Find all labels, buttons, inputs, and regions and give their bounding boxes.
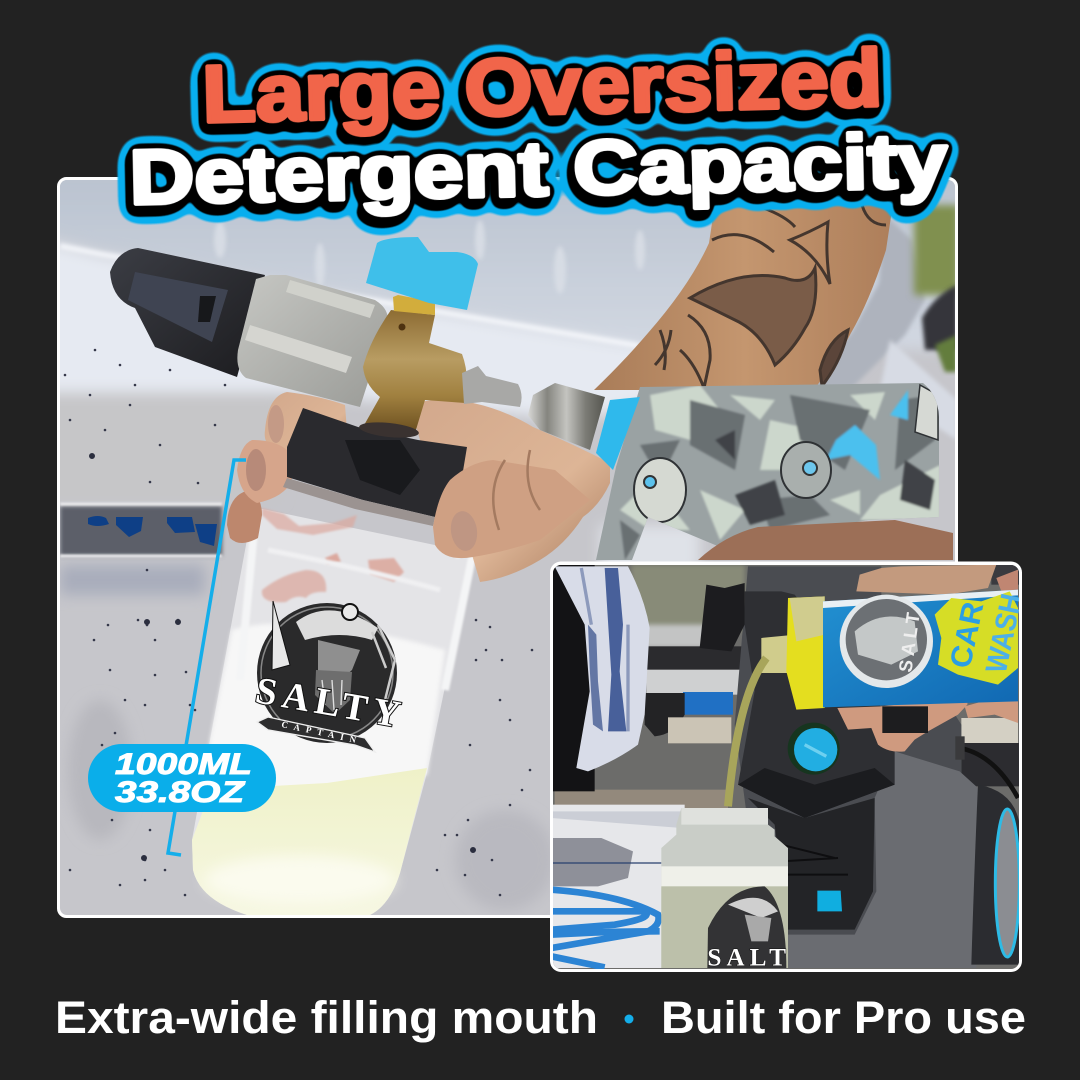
- inset scene: [548, 558, 1029, 978]
- feature: pro use: Built for Pro use: [661, 992, 1026, 1043]
- car wash bottle: [761, 590, 1029, 710]
- thumb: [433, 450, 590, 558]
- power cable: [960, 748, 1018, 798]
- ribbon caption: CAPTAIN: [281, 719, 357, 745]
- washer wheel: [971, 785, 1020, 965]
- detergent stream: [728, 658, 766, 806]
- foam bubble speckles: [65, 350, 532, 895]
- upper hand: [856, 565, 996, 595]
- black front panel: [738, 591, 895, 818]
- pirate hat: [296, 610, 378, 640]
- white foam fill: [208, 624, 444, 786]
- title line 1: Large Oversized: [201, 33, 883, 140]
- lower grille: [748, 798, 875, 930]
- car and foam backdrop: [40, 170, 960, 915]
- tattooed arm: [594, 190, 895, 390]
- emblem wordmark: SALT: [894, 611, 924, 674]
- brass body: [358, 310, 467, 440]
- brand wordmark: SALTY: [252, 670, 404, 736]
- feature: filling mouth: Extra-wide filling mouth: [55, 992, 598, 1043]
- capacity in millilitres: 1000ML: [115, 748, 252, 781]
- foam residue: [262, 508, 404, 602]
- capacity badge: [88, 744, 276, 812]
- brass nut: [393, 295, 435, 315]
- parked car behind: [555, 565, 745, 810]
- foamed car wheel: [551, 565, 650, 791]
- right fingertip: [996, 570, 1018, 591]
- hand fingers and palm: [227, 392, 610, 582]
- panel: main photo: [40, 170, 960, 916]
- jar: [661, 808, 788, 971]
- forearm below gun: [698, 520, 953, 560]
- capacity bracket line: [168, 460, 246, 855]
- blue switch: [817, 891, 842, 911]
- grey side body: [788, 751, 978, 968]
- pump cap: [287, 408, 467, 517]
- cap collar: [283, 478, 435, 526]
- title line 2: Detergent Capacity: [129, 118, 948, 221]
- foam bottle: [192, 507, 473, 915]
- jar logo: [707, 886, 786, 971]
- cable plug: [955, 736, 965, 760]
- blue collar: [596, 397, 640, 470]
- photo scene: [40, 170, 960, 915]
- car wash wordmark: CAR: [944, 599, 990, 671]
- backdrop: [548, 558, 1028, 978]
- panel: pouring inset photo: [548, 558, 1029, 978]
- pirate face: [318, 640, 360, 672]
- white car foreground: [551, 805, 685, 968]
- black block: [882, 706, 928, 733]
- grey adapter body: [237, 275, 388, 407]
- sword: [272, 601, 290, 670]
- liquid detergent: [192, 768, 427, 915]
- separator dot: [624, 1014, 634, 1024]
- beard: [315, 670, 352, 714]
- pirate logo: [252, 601, 404, 752]
- blue car trim band: [60, 504, 222, 556]
- large foam bubbles: [92, 456, 473, 858]
- black side bracket: [700, 583, 745, 651]
- car wash wordmark second line: WASH: [980, 591, 1029, 676]
- foam cannon nozzle: [110, 248, 265, 377]
- lower hand: [837, 686, 1018, 752]
- ribbon: [257, 717, 375, 752]
- arm tattoos: [655, 205, 886, 388]
- jar wordmark: SALT: [707, 943, 786, 971]
- skull badge: [342, 604, 358, 620]
- camo foam gun: [590, 380, 950, 565]
- capacity in ounces: 33.8OZ: [115, 776, 246, 809]
- yellow splash: [935, 591, 1018, 685]
- pressure washer housing: [735, 566, 978, 968]
- label emblem: [840, 595, 933, 688]
- blue washer cap: [788, 723, 840, 775]
- distant car and greenery: [818, 199, 955, 439]
- panel frame: [58, 178, 956, 916]
- quick connector: [528, 383, 605, 450]
- steel nipple: [462, 366, 522, 407]
- footer feature line: [55, 992, 1026, 1043]
- blue coiled hose: [551, 890, 660, 967]
- title: [129, 33, 948, 221]
- right background: [961, 565, 1021, 786]
- inset frame: [550, 562, 1022, 972]
- blue valve knob: [366, 237, 478, 310]
